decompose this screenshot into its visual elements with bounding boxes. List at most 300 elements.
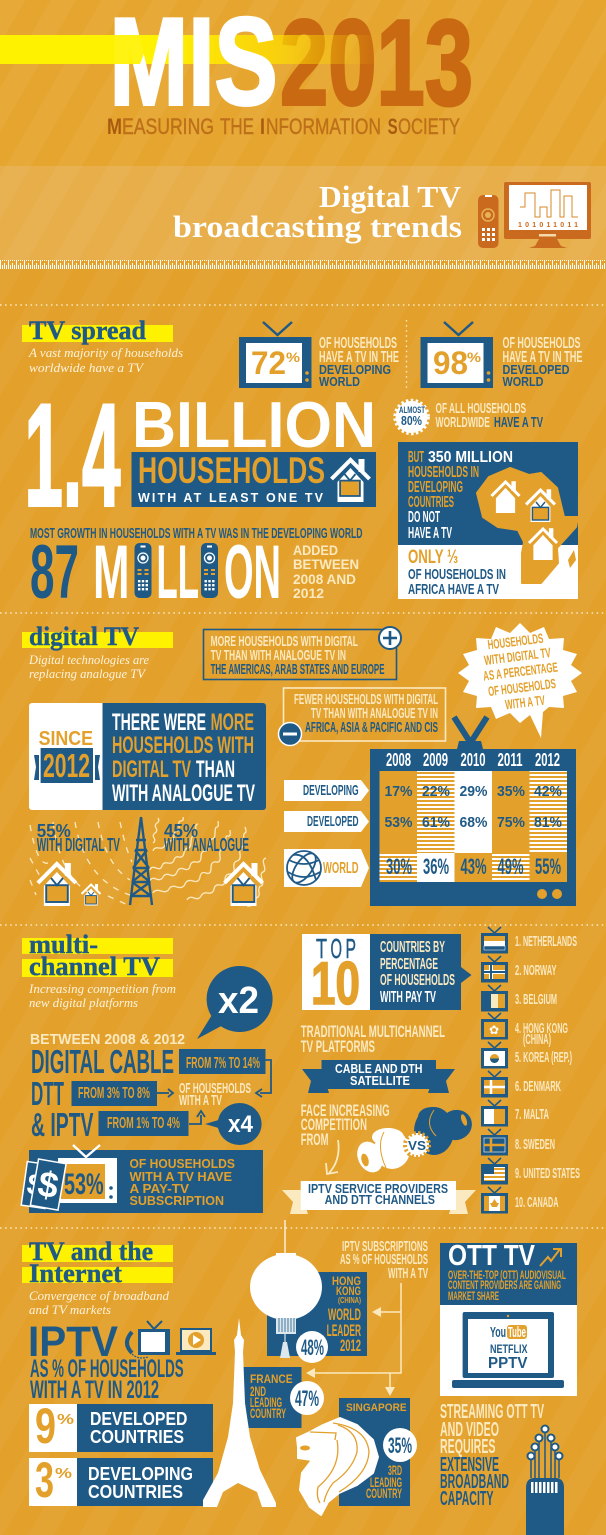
callout: fewer households: TV THAN WITH ANALOGUE TV IN [311, 705, 438, 722]
icon: TV 53% [58, 1145, 117, 1203]
callout: starburst bubble: WITH DIGITAL TV [483, 645, 552, 668]
chart: digital TV table in a TV set [370, 717, 576, 906]
panel: Singapore: 3RD [388, 1462, 402, 1478]
stat: 9% developed countries: DEVELOPED [90, 1409, 187, 1429]
year headers: 2011 [498, 750, 522, 770]
text: but 350 million [408, 449, 513, 542]
subtitle: Measuring the Information Society: OCIETY [398, 114, 460, 139]
values: developed [384, 814, 562, 831]
panel: Singapore: LEADING [370, 1474, 402, 1490]
intro text: and TV markets [29, 1302, 111, 1317]
big word: MILLION with remotes: ON [224, 530, 281, 615]
text: only one third: ONLY ⅓ [408, 547, 458, 568]
text: only one third: OF HOUSEHOLDS IN [408, 566, 506, 583]
badge: 48%: 48% [301, 1335, 324, 1360]
callout: more households [204, 627, 401, 680]
panel: since 2012: HOUSEHOLDS WITH [112, 732, 254, 759]
arrows: subscriptions to countries [306, 1283, 401, 1396]
text: pay-TV share: SUBSCRIPTION [130, 1194, 224, 1208]
icon: telephone [127, 1332, 148, 1358]
icon: laptop with services: Tube [508, 1324, 526, 1341]
yellow bar [0, 35, 380, 64]
title: MIS 2013 [0, 0, 473, 132]
flag: Canada: 10. CANADA [515, 1195, 559, 1211]
values: developed: 81% [534, 814, 562, 831]
yellow bar over M [0, 35, 150, 64]
text: streaming OTT TV [440, 1401, 544, 1510]
heading: Digital TV broadcasting trends [173, 179, 462, 244]
icon: rising arrow [540, 1249, 561, 1266]
ribbon: IPTV service providers: AND DTT CHANNELS [325, 1193, 435, 1207]
panel: France [244, 1367, 324, 1428]
values: world: 43% [460, 854, 486, 879]
text: traditional platforms: TRADITIONAL MULTICHANNEL [301, 1022, 445, 1041]
blue glove [414, 1105, 476, 1155]
text: face increasing competition: COMPETITION [301, 1115, 367, 1134]
label: developing [284, 780, 369, 801]
year headers: 2012 [535, 750, 560, 770]
panel: top 10 [302, 933, 472, 1017]
big number: 87: 87 [30, 530, 79, 615]
panel: since 2012 [29, 703, 266, 810]
text: traditional platforms: TV PLATFORMS [301, 1037, 375, 1056]
stat: 9% developed countries: 9 [35, 1398, 56, 1454]
text: added between: 2008 AND [293, 571, 356, 587]
text: 55% with digital TV [37, 821, 120, 855]
text: 45% with analogue [164, 821, 249, 855]
ribbon: cable and DTH satellite [302, 1060, 455, 1093]
icon: monitor [504, 182, 591, 248]
intro text [28, 345, 183, 375]
text: but 350 million: HAVE A TV [408, 525, 452, 542]
icon: large house left [38, 863, 76, 906]
callout: more households: THE AMERICAS, ARAB STATES AND EUROPE [211, 661, 384, 678]
text: of all households: WORLDWIDE [436, 414, 490, 431]
panel: OTT TV: OTT TV [448, 1240, 536, 1272]
badge: 47%: 47% [295, 1386, 319, 1411]
row: digital cable: DIGITAL CABLE [31, 1043, 174, 1080]
flag: Belgium: 3. BELGIUM [515, 992, 557, 1008]
callout: more households: TV THAN WITH ANALOGUE TV IN [211, 647, 346, 664]
callout: fewer households: FEWER HOUSEHOLDS WITH DIGITAL [294, 691, 438, 708]
values: developed: 75% [497, 814, 525, 831]
values: developing: 29% [460, 783, 488, 800]
icon: plus [379, 627, 401, 649]
panel: since 2012: MORE [211, 709, 254, 736]
subtitle: Measuring the Information Society: NFORMATION [266, 114, 381, 139]
text: added between: 2012 [293, 585, 324, 601]
values: world: 30% [386, 854, 412, 879]
values: developing [384, 783, 562, 800]
year headers: 2009 [423, 750, 448, 770]
icon: TV 53%: 53% [64, 1168, 104, 1201]
panel: digital TV [22, 622, 582, 906]
text: added between: ADDED [293, 542, 338, 558]
panel: OTT TV [440, 1240, 577, 1396]
stat text: developing world: WORLD [319, 374, 360, 389]
intro text: new digital platforms [29, 995, 138, 1010]
knobs [537, 889, 562, 899]
flag: Hong Kong: (CHINA) [523, 1032, 551, 1048]
text: of households with a TV: OF HOUSEHOLDS [179, 1080, 251, 1097]
subtitle: Measuring the Information Society: THE [220, 114, 254, 139]
heading: Digital TV broadcasting trends: broadcasting trends [173, 209, 462, 244]
panel: multi-channel TV [21, 927, 580, 1214]
text: streaming OTT TV: EXTENSIVE [440, 1454, 499, 1476]
icon: TV 98% [420, 322, 493, 388]
bubble: x4 [205, 1103, 262, 1145]
subtitle: Measuring the Information Society [107, 114, 460, 139]
text: as % of households [30, 1355, 184, 1404]
badge: 48% [296, 1331, 328, 1363]
subtitle: Measuring the Information Society: EASURING [122, 114, 214, 139]
illustration: lantern [250, 1220, 322, 1358]
text: IPTV subscriptions [340, 1238, 428, 1282]
heading: TV spread: TV spread [29, 316, 147, 345]
stat text: developing world [319, 335, 399, 389]
stat: 9% developed countries [29, 1398, 213, 1454]
panel: top 10: OF HOUSEHOLDS [380, 972, 455, 989]
subtitle: Measuring the Information Society: M [107, 114, 122, 139]
row: IPTV: & IPTV [31, 1106, 94, 1143]
icon: remote [201, 543, 218, 598]
label: developing: DEVELOPING [303, 782, 359, 799]
icon: globe [287, 849, 321, 887]
text: TOP: O [330, 933, 342, 964]
text: added between [293, 542, 359, 601]
label: developed: DEVELOPED [307, 813, 359, 830]
panel: France: COUNTRY [250, 1405, 286, 1421]
panel: since 2012: WITH ANALOGUE TV [112, 780, 255, 807]
subtitle: Measuring the Information Society: I [260, 114, 265, 139]
callout: more households: MORE HOUSEHOLDS WITH DIGITAL [211, 633, 358, 650]
values: developed: 68% [460, 814, 488, 831]
heading: TV and the Internet: Internet [29, 1259, 122, 1288]
white glove [352, 1128, 410, 1177]
intro text [28, 981, 176, 1010]
bubble: x4: x4 [228, 1111, 254, 1138]
callout: starburst bubble: HOUSEHOLDS [487, 631, 544, 652]
panel: Singapore: COUNTRY [366, 1485, 402, 1501]
arrow: curved down [326, 1140, 339, 1174]
big word: MILLION with remotes [93, 530, 281, 615]
text: of households with a TV: WITH A TV [179, 1092, 222, 1109]
ribbon: IPTV service providers [282, 1181, 476, 1214]
text: face increasing competition: FROM [301, 1130, 328, 1149]
text: but 350 million: DO NOT [408, 509, 440, 526]
intro text: Increasing competition from [28, 981, 176, 996]
ribbon: cable and DTH satellite: CABLE AND DTH [335, 1062, 422, 1076]
badge: almost 80%: 80% [401, 413, 422, 428]
text: face increasing competition: FACE INCREASING [301, 1101, 390, 1120]
icon: laptop with services: You [490, 1324, 506, 1341]
stat text: developing world: HAVE A TV IN THE [319, 349, 399, 366]
stat: 3% developing countries: DEVELOPING [88, 1464, 193, 1484]
intro text: Convergence of broadband [29, 1288, 169, 1303]
panel: France: FRANCE [250, 1372, 293, 1386]
text: face increasing competition [301, 1101, 390, 1149]
text: streaming OTT TV: REQUIRES [440, 1436, 496, 1458]
text: 45% with analogue: WITH ANALOGUE [164, 835, 249, 855]
stat: 9% developed countries: % [57, 1411, 74, 1428]
heading: Digital TV broadcasting trends: Digital TV [319, 179, 462, 214]
flag: Norway [481, 956, 557, 982]
flag: Hong Kong [481, 1013, 568, 1048]
values: developing: 17% [384, 783, 412, 800]
panel: TV spread [22, 316, 583, 615]
flag: Hong Kong: ✿ [489, 1023, 499, 1037]
icon: TV [138, 1321, 170, 1355]
flag: Belgium [481, 985, 557, 1012]
panel: OTT TV: MARKET SHARE [448, 1291, 499, 1303]
icon: dollar bills: $ [35, 1163, 62, 1206]
text: most growth: MOST GROWTH IN HOUSEHOLDS WITH A TV WAS IN THE DEVELOPING WORLD [30, 525, 363, 542]
badge: VS: VS [408, 1138, 426, 1153]
callout: starburst bubble [458, 623, 582, 738]
big word: BILLION: BILLION [132, 388, 376, 461]
text: but 350 million: DEVELOPING [408, 479, 463, 496]
ribbon: cable and DTH satellite: SATELLITE [350, 1074, 410, 1088]
heading: TV and the Internet: TV and the [29, 1237, 153, 1266]
icon: monitor: 101011011 [518, 222, 578, 229]
text: added between: BETWEEN [293, 556, 359, 572]
stat text: developed world: DEVELOPED [502, 362, 570, 377]
icon: dollar bills: $ [25, 1168, 46, 1203]
label: developed [284, 811, 369, 832]
flag: United States [481, 1158, 580, 1184]
ribbon: IPTV service providers: IPTV SERVICE PROVIDERS [308, 1182, 448, 1196]
flag: Sweden: 8. SWEDEN [515, 1137, 555, 1153]
flag: Malta: 7. MALTA [515, 1107, 549, 1123]
panel: Hong Kong: LEADER [327, 1321, 361, 1340]
intro text: replacing analogue TV [29, 666, 147, 681]
text: TOP: P [346, 933, 356, 964]
text: streaming OTT TV: BROADBAND [440, 1471, 509, 1493]
icon: large house right [224, 863, 262, 906]
stat: 3% developing countries: % [55, 1465, 72, 1482]
values: world: 55% [535, 854, 561, 879]
text: of all households [436, 400, 543, 431]
callout: starburst bubble: OF HOUSEHOLDS [487, 676, 557, 699]
flag: Korea [481, 1042, 572, 1068]
illustration: Merlion [297, 1418, 378, 1515]
callout: starburst bubble: WITH A TV [504, 693, 546, 712]
panel: France: LEADING [250, 1394, 282, 1410]
icon: remote [134, 543, 152, 598]
values: world: 49% [498, 854, 524, 879]
values: developing: 22% [422, 783, 450, 800]
arrows [157, 1060, 271, 1124]
row: DTT: DTT [31, 1075, 64, 1112]
stat: 9% developed countries: COUNTRIES [90, 1427, 184, 1447]
panel: Hong Kong: 2012 [340, 1336, 361, 1355]
panel: top 10: PERCENTAGE [380, 956, 438, 973]
panel: pay-TV [21, 1145, 263, 1213]
label: world with globe: WORLD [323, 860, 359, 877]
stat: 3% developing countries: COUNTRIES [88, 1482, 183, 1502]
panel: since 2012: SINCE [39, 728, 93, 750]
text: pay-TV share: WITH A TV HAVE [130, 1170, 232, 1184]
big word: MILLION with remotes: LL [156, 530, 199, 615]
icon: laptop with play button [176, 1329, 216, 1355]
icon: minus [278, 722, 302, 746]
values: world [386, 854, 561, 879]
panel: Hong Kong: (CHINA) [338, 1296, 361, 1305]
row: IPTV [31, 1106, 188, 1143]
panel: top 10: 10 [311, 950, 360, 1017]
text: of households with a TV [179, 1080, 251, 1109]
stat text: developing world: DEVELOPING [319, 362, 391, 377]
list: top 10 flags [481, 927, 580, 1214]
badge: almost 80%: ALMOST [399, 405, 425, 415]
intro text: Digital technologies are [28, 652, 149, 667]
illustration: signal waves [30, 817, 266, 906]
panel: Hong Kong: KONG [336, 1286, 361, 1298]
icon: laptop with services [452, 1312, 564, 1388]
panel: TV and the Internet [22, 1220, 577, 1535]
panel: since 2012: THAN [196, 756, 235, 783]
bubble: x2 [197, 966, 273, 1039]
stat text: developed world: WORLD [502, 374, 544, 389]
icon: TV 98%: 98 [433, 345, 468, 381]
heading: multi-channel TV: channel TV [29, 952, 160, 981]
text: but 350 million: HOUSEHOLDS IN [408, 464, 479, 481]
year headers [386, 750, 560, 770]
intro text [28, 652, 149, 681]
heading: digital TV: digital TV [29, 622, 139, 651]
big word: MILLION with remotes: M [93, 530, 130, 615]
panel: households [132, 450, 376, 507]
callout: fewer households [278, 688, 446, 746]
values: world: 36% [423, 854, 449, 879]
text: but 350 million: COUNTRIES [408, 494, 454, 511]
intro text: A vast majority of households [28, 345, 183, 360]
panel: TV spread: 1.4 [24, 374, 120, 536]
text: TOP: T [316, 933, 327, 964]
icon: small house [82, 884, 100, 906]
values: developing: 35% [497, 783, 525, 800]
panel: Africa [398, 442, 578, 599]
row: DTT [31, 1075, 157, 1112]
flag: Norway: 2. NORWAY [515, 963, 557, 979]
text: between 2008 and 2012: BETWEEN 2008 & 2012 [30, 1031, 185, 1048]
icon: TV 72%: 72 [251, 345, 286, 381]
text: IPTV subscriptions: AS % OF HOUSEHOLDS [340, 1251, 428, 1268]
text: IPTV subscriptions: IPTV SUBSCRIPTIONS [342, 1238, 428, 1255]
heading: multi-channel TV: multi- [29, 930, 98, 959]
icon: TV 98%: % [467, 349, 482, 365]
text: as % of households: WITH A TV IN 2012 [30, 1376, 159, 1404]
year headers: 2010 [460, 750, 486, 770]
panel: top 10: COUNTRIES BY [380, 939, 445, 956]
panel: France: 2ND [250, 1383, 266, 1399]
illustration: Eiffel Tower [203, 1318, 276, 1507]
badge: 35%: 35% [388, 1433, 412, 1458]
ribbon: 2012 [34, 747, 100, 784]
text: pay-TV share: A PAY-TV [130, 1182, 190, 1196]
text: IPTV subscriptions: WITH A TV [388, 1265, 428, 1282]
icon: TV 72% [239, 322, 312, 388]
antenna [454, 717, 487, 749]
icon: laptop with services: PPTV [488, 1355, 528, 1372]
illustration: broadcast tower [130, 817, 152, 905]
text: only one third: AFRICA HAVE A TV [408, 581, 499, 598]
stat: 3% developing countries: 3 [35, 1452, 54, 1508]
flag: Sweden [481, 1129, 555, 1156]
ribbon: 2012: 2012 [43, 747, 90, 784]
icon: dollar bills [21, 1159, 66, 1210]
row: digital cable: FROM 7% TO 14% [186, 1055, 260, 1072]
map: Africa [477, 468, 578, 583]
flag: Denmark [481, 1071, 561, 1098]
heading: IPTV: IPTV [28, 1318, 118, 1366]
values: developed: 61% [422, 814, 450, 831]
flag: Netherlands [481, 927, 577, 954]
icon: house with TV [332, 459, 370, 502]
bubble: x2: x2 [218, 980, 259, 1022]
subtitle: Measuring the Information Society: S [388, 114, 398, 139]
text: 45% with analogue: 45% [164, 821, 198, 841]
text: 55% with digital TV: 55% [37, 821, 71, 841]
intro text [29, 1288, 169, 1317]
icon: boxing gloves [352, 1105, 476, 1177]
panel: households: HOUSEHOLDS [138, 450, 325, 491]
text: pay-TV share [130, 1157, 235, 1208]
panel: Singapore [339, 1398, 417, 1506]
stat text: developing world: OF HOUSEHOLDS [319, 335, 397, 352]
text: TOP [316, 933, 356, 964]
intro text: worldwide have a TV [29, 360, 145, 375]
text: streaming OTT TV: CAPACITY [440, 1488, 494, 1510]
table cells [380, 771, 567, 882]
flag: Denmark: 6. DENMARK [515, 1079, 561, 1095]
icon: laptop with services: NETFLIX [490, 1342, 528, 1356]
text: traditional platforms [301, 1022, 445, 1056]
text: but 350 million: BUT [408, 449, 424, 466]
text: only one third [408, 547, 506, 598]
text: but 350 million: 350 MILLION [428, 449, 513, 466]
year headers: 2008 [386, 750, 411, 770]
panel: since 2012: DIGITAL TV [112, 756, 191, 783]
text: of all households: OF ALL HOUSEHOLDS [436, 400, 526, 417]
icon: fibre optic cable [526, 1426, 564, 1535]
icon: remote control [478, 195, 498, 248]
badge: almost 80% [395, 400, 428, 434]
row: IPTV: FROM 1% TO 4% [107, 1115, 180, 1132]
panel: Hong Kong [250, 1220, 367, 1363]
heading: TV and the Internet [22, 1237, 173, 1288]
heading: multi-channel TV [22, 930, 173, 981]
panel: Singapore: SINGAPORE [346, 1402, 407, 1414]
text: as % of households: AS % OF HOUSEHOLDS [30, 1355, 184, 1383]
flag: Canada [481, 1187, 559, 1214]
stat text: developed world [502, 335, 583, 389]
panel: Hong Kong: WORLD [328, 1305, 361, 1324]
values: developed: 53% [384, 814, 412, 831]
label: world with globe [284, 849, 369, 887]
text: 55% with digital TV: WITH DIGITAL TV [37, 835, 120, 855]
icon: TV 72%: % [286, 349, 301, 365]
stat: 3% developing countries [29, 1452, 213, 1508]
panel: since 2012: THERE WERE [112, 709, 206, 736]
values: developing: 42% [534, 783, 562, 800]
callout: fewer households: AFRICA, ASIA & PACIFIC AND CIS [305, 719, 438, 736]
panel: top 10: WITH PAY TV [380, 989, 436, 1006]
panel: Hong Kong: HONG [332, 1276, 361, 1288]
text: pay-TV share: OF HOUSEHOLDS [130, 1157, 235, 1171]
text: streaming OTT TV: AND VIDEO [440, 1419, 499, 1441]
text: of all households: HAVE A TV [494, 414, 543, 431]
